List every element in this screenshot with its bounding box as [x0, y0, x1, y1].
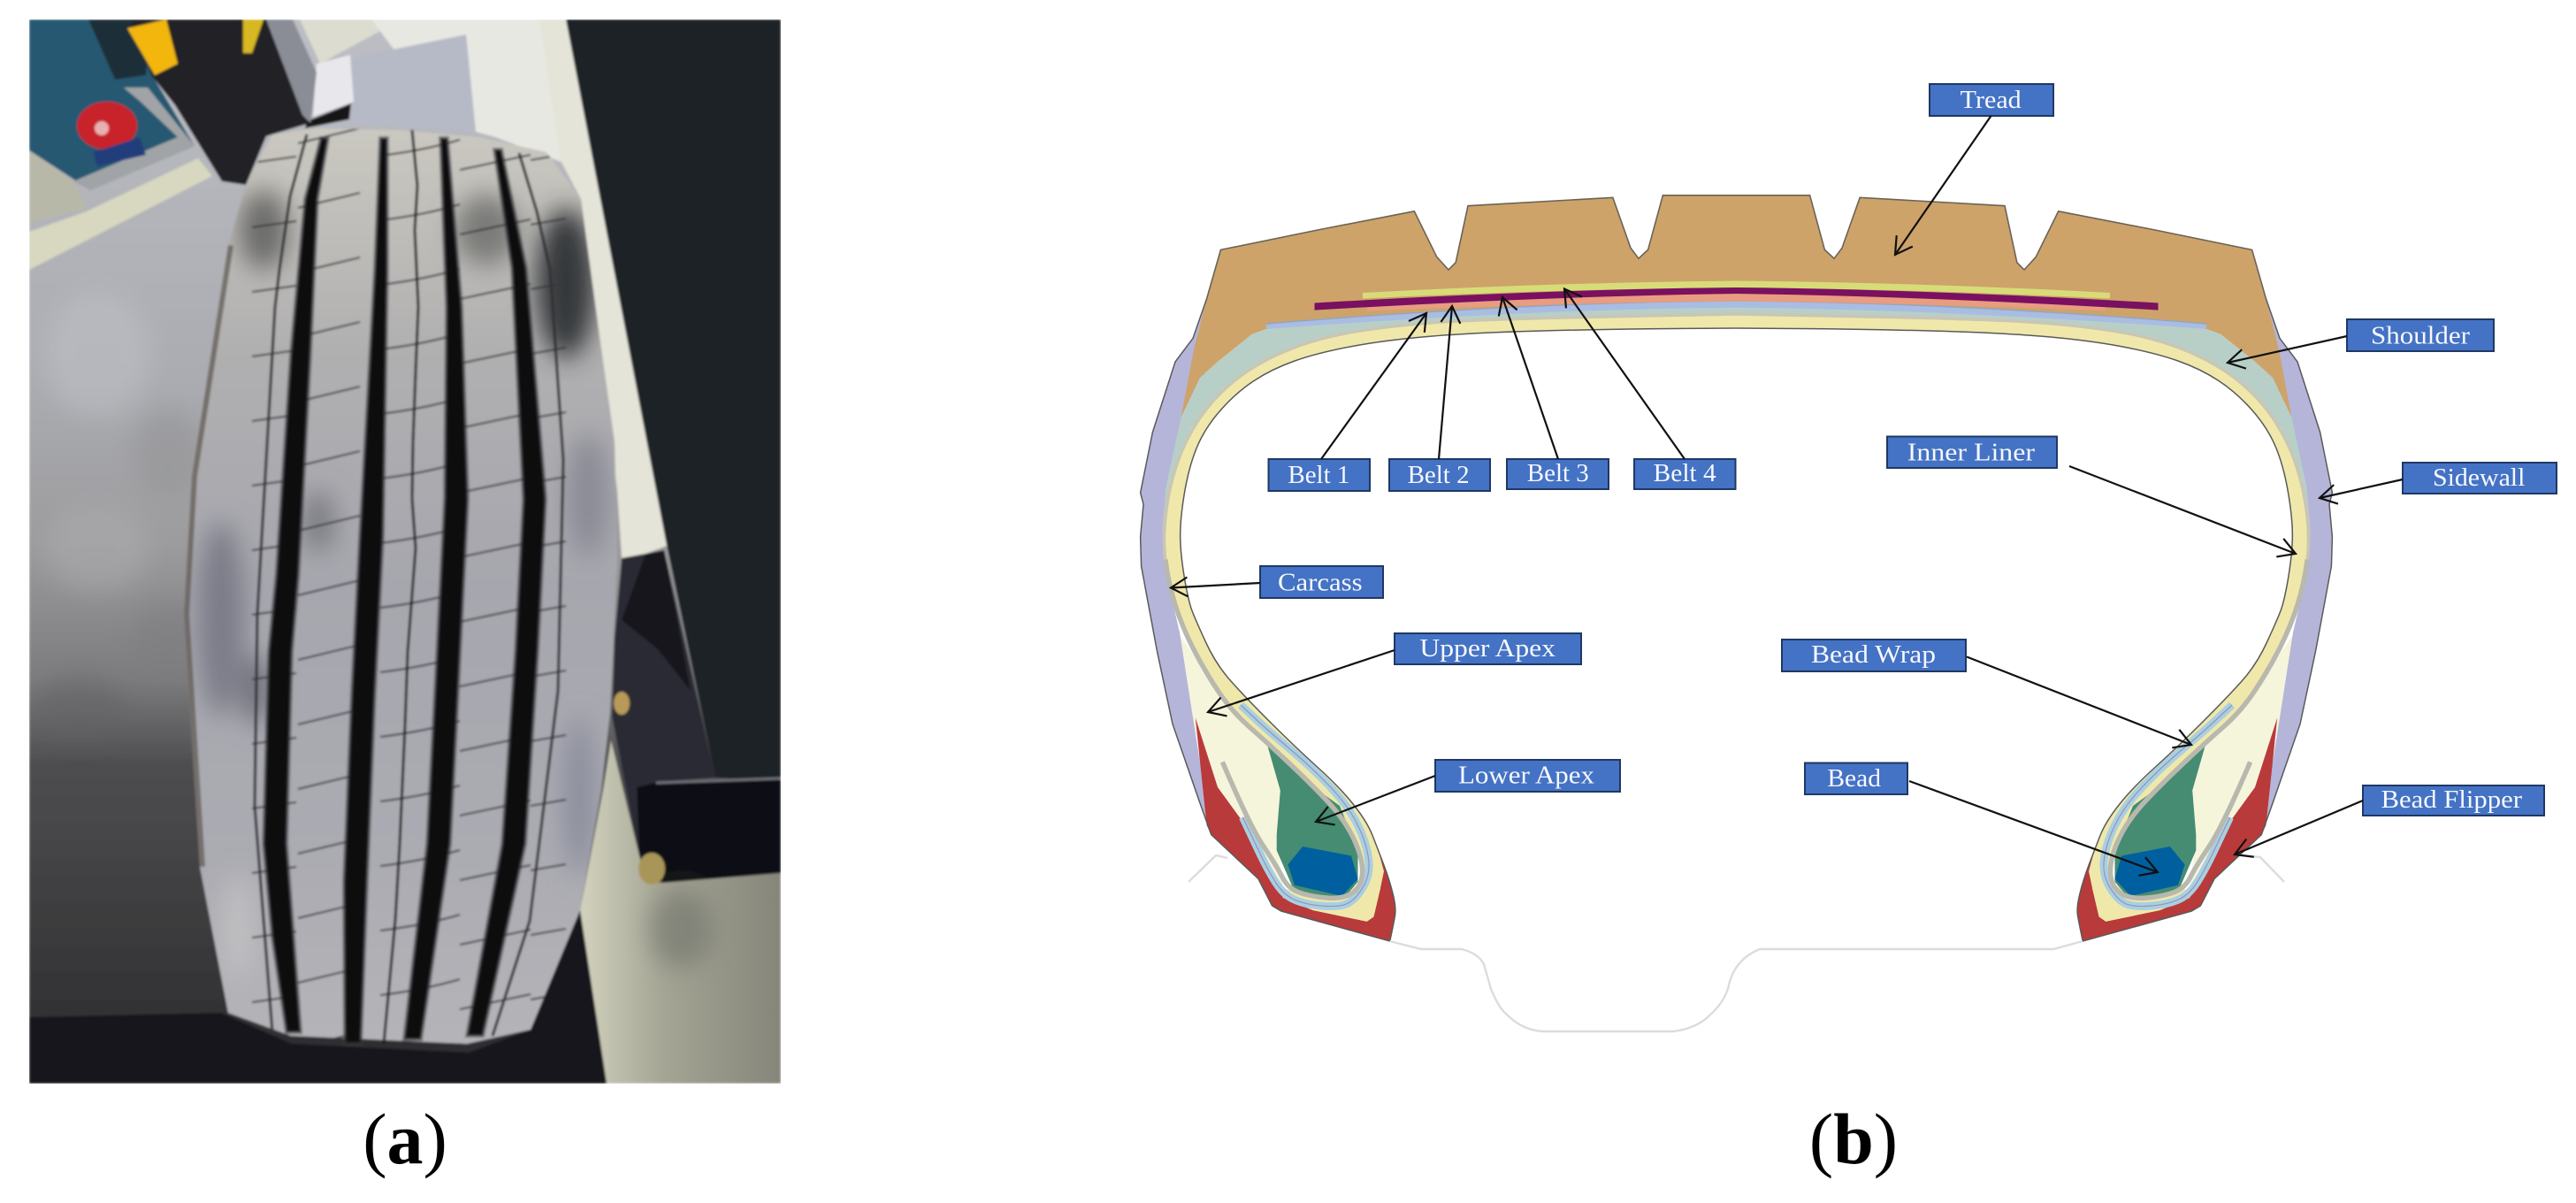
- tire cross-section: [1141, 195, 2332, 1061]
- tire outlines: [1141, 299, 1737, 941]
- photo background: yellow box: [127, 19, 178, 75]
- callout: Belt 2: [1389, 306, 1490, 491]
- sidewall: [1141, 299, 1238, 835]
- photo: center wavy sipe: [384, 130, 418, 1044]
- callout: Belt 3: Belt 3: [1527, 459, 1589, 487]
- photo: circumferential thin grooves: [255, 134, 563, 1036]
- photo: transverse sipes: [248, 124, 570, 1044]
- cavity: [1181, 328, 1737, 1061]
- callout: Carcass: [1171, 566, 1383, 598]
- bead flipper: [1196, 717, 1396, 941]
- photo: tire body: [184, 128, 617, 1044]
- photo background: mid block: [612, 550, 715, 856]
- photo background: beige ledge: [29, 149, 87, 223]
- carcass ply lower: [1166, 559, 1363, 898]
- rim outline: [1189, 855, 2284, 1031]
- shoulder wedge: [1162, 306, 1737, 537]
- callout: Tread: [1895, 84, 2053, 255]
- tread: [1181, 195, 1737, 418]
- belt 4: [1363, 281, 1737, 299]
- inner liner: [1163, 314, 1737, 922]
- callout: Shoulder: [2228, 319, 2494, 363]
- photo background: floor: [29, 19, 781, 1084]
- left half of tire section: [1141, 195, 1737, 1061]
- callout: Upper Apex: [1208, 633, 1581, 712]
- photo: tire wear shading: [198, 190, 609, 982]
- callout: Inner Liner: [1887, 437, 2296, 554]
- callout: Belt 3: [1502, 297, 1609, 489]
- callout: Tread: Tread: [1961, 86, 2022, 114]
- bead: [1288, 847, 1358, 896]
- inner liner edge fill: [1181, 328, 1737, 836]
- lower apex: [1268, 747, 1358, 898]
- right half of tire section: [1735, 195, 2332, 1061]
- callout: Sidewall: Sidewall: [2433, 464, 2525, 492]
- callout: Belt 4: Belt 4: [1654, 459, 1716, 487]
- photo background: light floor right: [580, 740, 781, 1084]
- upper apex: [1172, 624, 1283, 889]
- caption (b): (b): [1809, 1099, 1898, 1179]
- photo background: dark block: [566, 19, 781, 783]
- callout: Bead Flipper: [2235, 785, 2544, 854]
- callout: Upper Apex: Upper Apex: [1419, 634, 1556, 663]
- callout: Carcass: Carcass: [1278, 568, 1363, 596]
- belt 2: [1367, 294, 1737, 311]
- bead wrap: [1241, 705, 1369, 907]
- callout: Inner Liner: Inner Liner: [1907, 438, 2035, 466]
- tread outline: [1207, 195, 1737, 299]
- belt 1: [1266, 301, 1737, 329]
- photo: left edge stripe: [184, 245, 228, 867]
- photo background: lower block: [637, 778, 781, 883]
- callout: Sidewall: [2320, 463, 2557, 498]
- callout: Bead Flipper: Bead Flipper: [2381, 785, 2522, 814]
- photo: bolts: [614, 692, 630, 715]
- photo background: warm wall and white panel: [300, 19, 380, 64]
- callout: Bead Wrap: [1782, 640, 2191, 745]
- callout: Bead Wrap: Bead Wrap: [1811, 640, 1936, 669]
- photo background: blue equipment: [29, 19, 195, 190]
- carcass ply upper: [1164, 314, 1737, 559]
- callout: Bead: [1805, 762, 2158, 872]
- callout: Belt 1: Belt 1: [1288, 461, 1349, 489]
- callout: Bead: Bead: [1827, 764, 1882, 793]
- belt 3: [1314, 287, 1737, 310]
- photo background: light strip by block: [539, 19, 667, 558]
- photo background: dark machine: [131, 19, 310, 185]
- callout: Lower Apex: [1316, 760, 1620, 822]
- photo background: floor mottling: [53, 303, 195, 697]
- callout: Belt 4: [1564, 288, 1735, 489]
- photo: worn truck tire: [29, 19, 781, 1084]
- caption (a): (a): [363, 1099, 447, 1179]
- photo: main grooves: [264, 138, 546, 1044]
- callout: Lower Apex: Lower Apex: [1458, 761, 1595, 789]
- callout: Belt 2: Belt 2: [1408, 461, 1470, 489]
- photo background: shadow under tire: [29, 910, 607, 1084]
- callout: Belt 1: [1268, 313, 1426, 491]
- callout: Shoulder: Shoulder: [2371, 322, 2470, 350]
